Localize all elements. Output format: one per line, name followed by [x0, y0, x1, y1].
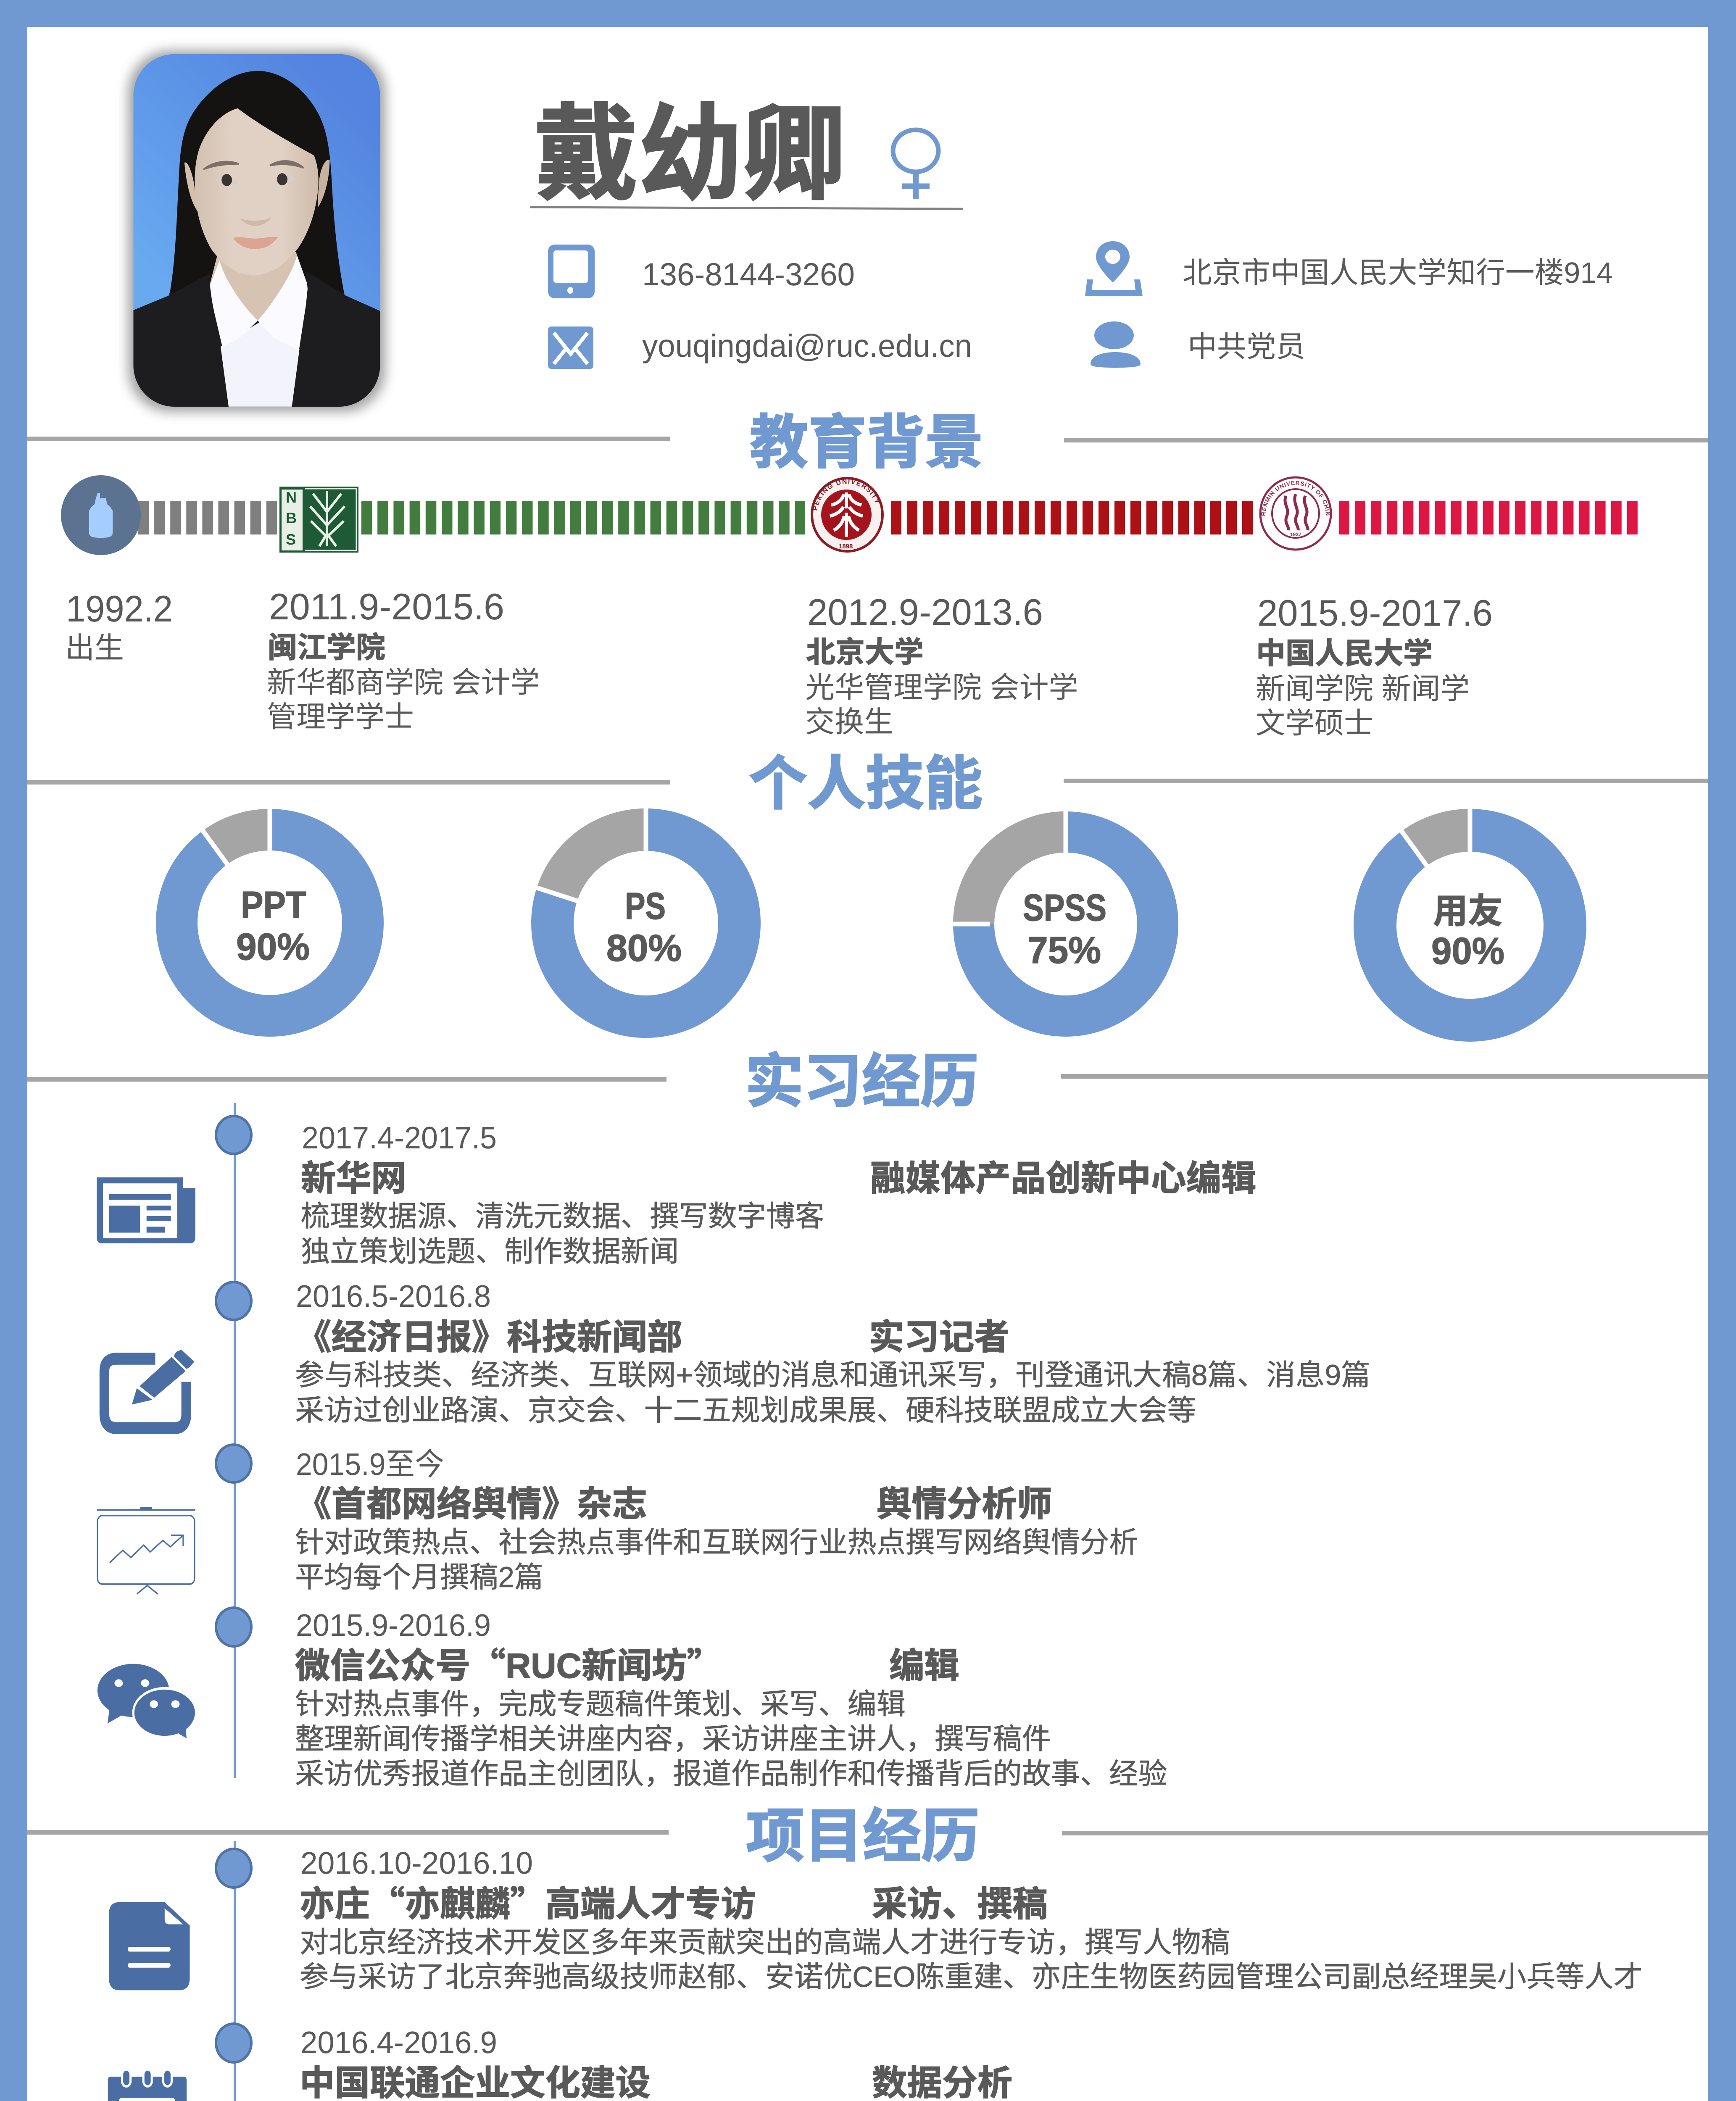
section rule left [27, 1077, 666, 1082]
panel: skills [27, 751, 1708, 1020]
entry: Xinhua: 2017.4-2017.5 [302, 1120, 497, 1155]
contact: political status [1091, 321, 1305, 368]
entry: Capital Network Opinion [295, 1447, 1138, 1593]
entry: Economic Daily: 2016.5-2016.8 [296, 1279, 491, 1314]
logo: Minjiang NBS: B [286, 509, 297, 527]
donut: PS 80% [532, 805, 740, 1017]
donut: SPSS 75%: 75% [1027, 929, 1101, 972]
donut: Yonyou 90%: 用友 [1433, 892, 1503, 931]
entry: WeChat RUC: 2015.9-2016.9 [296, 1608, 491, 1643]
name underline [530, 207, 963, 209]
heading: education: 教育背景 [750, 410, 983, 475]
entry: China Unicom [300, 2025, 1012, 2101]
entry: Economic Daily: 《经济日报》科技新闻部 [296, 1317, 682, 1357]
entry: Yizhuang: 亦庄“亦麒麟”高端人才专访 [300, 1876, 756, 1927]
section rule right [1062, 1831, 1708, 1835]
icon: newspaper [97, 1177, 195, 1243]
timeline bars [138, 501, 1638, 534]
address text: 北京市中国人民大学知行一楼914 [1183, 256, 1613, 289]
entry: Peking University [805, 591, 1078, 738]
entry: WeChat RUC: 整理新闻传播学相关讲座内容，采访讲座主讲人，撰写稿件 [295, 1722, 1051, 1755]
logo: Peking University: 1898 [839, 543, 853, 550]
entry: Xinhua: 融媒体产品创新中心编辑 [870, 1158, 1257, 1198]
name: 戴幼卿 [535, 97, 846, 213]
logo: Minjiang NBS: S [286, 531, 296, 548]
phone number: 136-8144-3260 [642, 257, 855, 292]
entry: Capital Network Opinion: 舆情分析师 [877, 1484, 1052, 1524]
entry: WeChat RUC: 微信公众号“RUC新闻坊” [295, 1638, 722, 1688]
entry: WeChat RUC: 编辑 [889, 1646, 959, 1685]
entry: Yizhuang: 参与采访了北京奔驰高级技师赵郁、安诺优CEO陈重建、亦庄生物医药园管理公司副总经理吴小兵等人才 [300, 1960, 1643, 1993]
heading: skills: 个人技能 [749, 751, 983, 816]
panel: education [0, 0, 1708, 740]
donut: PS 80%: PS [625, 885, 666, 927]
entry: Renmin University: 2015.9-2017.6 [1257, 592, 1493, 634]
icon: phone [548, 245, 595, 298]
heading: projects: 项目经历 [746, 1804, 980, 1869]
donut: SPSS 75% [950, 807, 1158, 1016]
entry: Capital Network Opinion: 针对政策热点、社会热点事件和互联网行业热点撰写网络舆情分析 [295, 1526, 1138, 1559]
entry: Xinhua: 独立策划选题、制作数据新闻 [301, 1235, 679, 1268]
entry: Peking University: 交换生 [805, 706, 893, 738]
logo: Minjiang NBS [279, 487, 358, 553]
entry: WeChat RUC: 采访优秀报道作品主创团队，报道作品制作和传播背后的故事、经验 [295, 1757, 1167, 1790]
icon: female symbol [893, 130, 938, 199]
logo: Peking University: PEKING UNIVERSITY [812, 478, 881, 511]
entry: Yizhuang: 采访、撰稿 [872, 1884, 1047, 1924]
entry: Capital Network Opinion: 2015.9至今 [296, 1447, 444, 1482]
icon: notepad check [108, 2069, 192, 2101]
portrait photo [128, 50, 385, 412]
entry: Renmin University [1256, 592, 1493, 740]
donut: PPT 90% [176, 805, 363, 1016]
section rule right [1064, 779, 1708, 783]
panel: projects [27, 1804, 1708, 2101]
contact: email [548, 326, 972, 369]
donut: Yonyou 90%: 90% [1431, 930, 1504, 972]
donut: SPSS 75%: SPSS [1023, 887, 1106, 929]
donut: PPT 90%: PPT [241, 884, 306, 926]
entry: China Unicom: 2016.4-2016.9 [300, 2025, 497, 2060]
heading: internships: 实习经历 [745, 1049, 979, 1114]
entry: Economic Daily: 实习记者 [869, 1317, 1009, 1357]
entry: WeChat RUC [295, 1608, 1167, 1790]
entry: Minjiang University [267, 586, 540, 733]
entry: Peking University: 光华管理学院 会计学 [805, 671, 1078, 704]
section rule left [27, 780, 670, 785]
donut: PS 80%: 80% [606, 927, 682, 969]
icon: presentation chart [97, 1507, 195, 1594]
entry: Economic Daily [295, 1279, 1370, 1427]
donut: Yonyou 90% [1375, 805, 1565, 1020]
entry: birth: 出生 [65, 632, 124, 664]
entry: Economic Daily: 采访过创业路演、京交会、十二五规划成果展、硬科技联盟成立大会等 [295, 1394, 1196, 1427]
status text: 中共党员 [1188, 330, 1305, 363]
email address: youqingdai@ruc.edu.cn [642, 328, 972, 364]
icon: person [1091, 321, 1141, 368]
timeline: projects [216, 1841, 251, 2101]
entry: Minjiang University: 管理学学士 [267, 700, 414, 733]
entry: Peking University: 2012.9-2013.6 [807, 591, 1043, 633]
entry: birth [65, 588, 173, 664]
panel: internships [27, 1049, 1708, 1790]
icon: location pin [1085, 241, 1143, 296]
logo: Renmin University: RENMIN UNIVERSITY OF CHINA [0, 0, 1331, 516]
entry: Yizhuang: 2016.10-2016.10 [300, 1846, 533, 1880]
section rule right [1064, 438, 1708, 442]
entry: WeChat RUC: 针对热点事件，完成专题稿件策划、采写、编辑 [295, 1688, 906, 1720]
entry: Xinhua: 新华网 [301, 1158, 406, 1198]
entry: Renmin University: 中国人民大学 [1256, 637, 1433, 670]
entry: Yizhuang: 对北京经济技术开发区多年来贡献突出的高端人才进行专访，撰写人物稿 [300, 1926, 1230, 1959]
entry: Capital Network Opinion: 《首都网络舆情》杂志 [296, 1484, 647, 1524]
entry: Minjiang University: 2011.9-2015.6 [269, 586, 504, 627]
donut: PPT 90%: 90% [236, 926, 310, 968]
entry: Renmin University: 文学硕士 [1256, 707, 1373, 740]
entry: Yizhuang [300, 1846, 1643, 1993]
icon: edit [104, 1350, 194, 1428]
panel: header [128, 50, 1613, 412]
entry: birth: 1992.2 [66, 588, 173, 629]
logo: Peking University [812, 478, 882, 551]
section rule right [1061, 1074, 1708, 1079]
entry: Renmin University: 新闻学院 新闻学 [1256, 672, 1470, 705]
timeline: internships [216, 1103, 251, 1778]
logo: Renmin University: 1937 [1290, 532, 1301, 537]
entry: Capital Network Opinion: 平均每个月撰稿2篇 [295, 1561, 543, 1593]
icon: baby bottle [61, 475, 141, 555]
entry: Xinhua [301, 1120, 1257, 1268]
entry: Economic Daily: 参与科技类、经济类、互联网+领域的消息和通讯采写，刊登通讯大稿8篇、消息9篇 [295, 1359, 1370, 1391]
icon: document [109, 1902, 190, 1990]
section rule left [27, 1830, 669, 1835]
entry: Minjiang University: 新华都商学院 会计学 [267, 666, 540, 699]
icon: wechat bubbles [97, 1664, 196, 1738]
entry: Xinhua: 梳理数据源、清洗元数据、撰写数字博客 [301, 1200, 824, 1232]
icon: envelope [548, 326, 593, 369]
entry: Minjiang University: 闽江学院 [268, 631, 385, 664]
contact: phone [548, 245, 855, 298]
entry: Peking University: 北京大学 [806, 636, 924, 669]
contact: address [1085, 241, 1613, 296]
logo: Minjiang NBS: N [286, 489, 297, 506]
section rule left [27, 437, 670, 441]
